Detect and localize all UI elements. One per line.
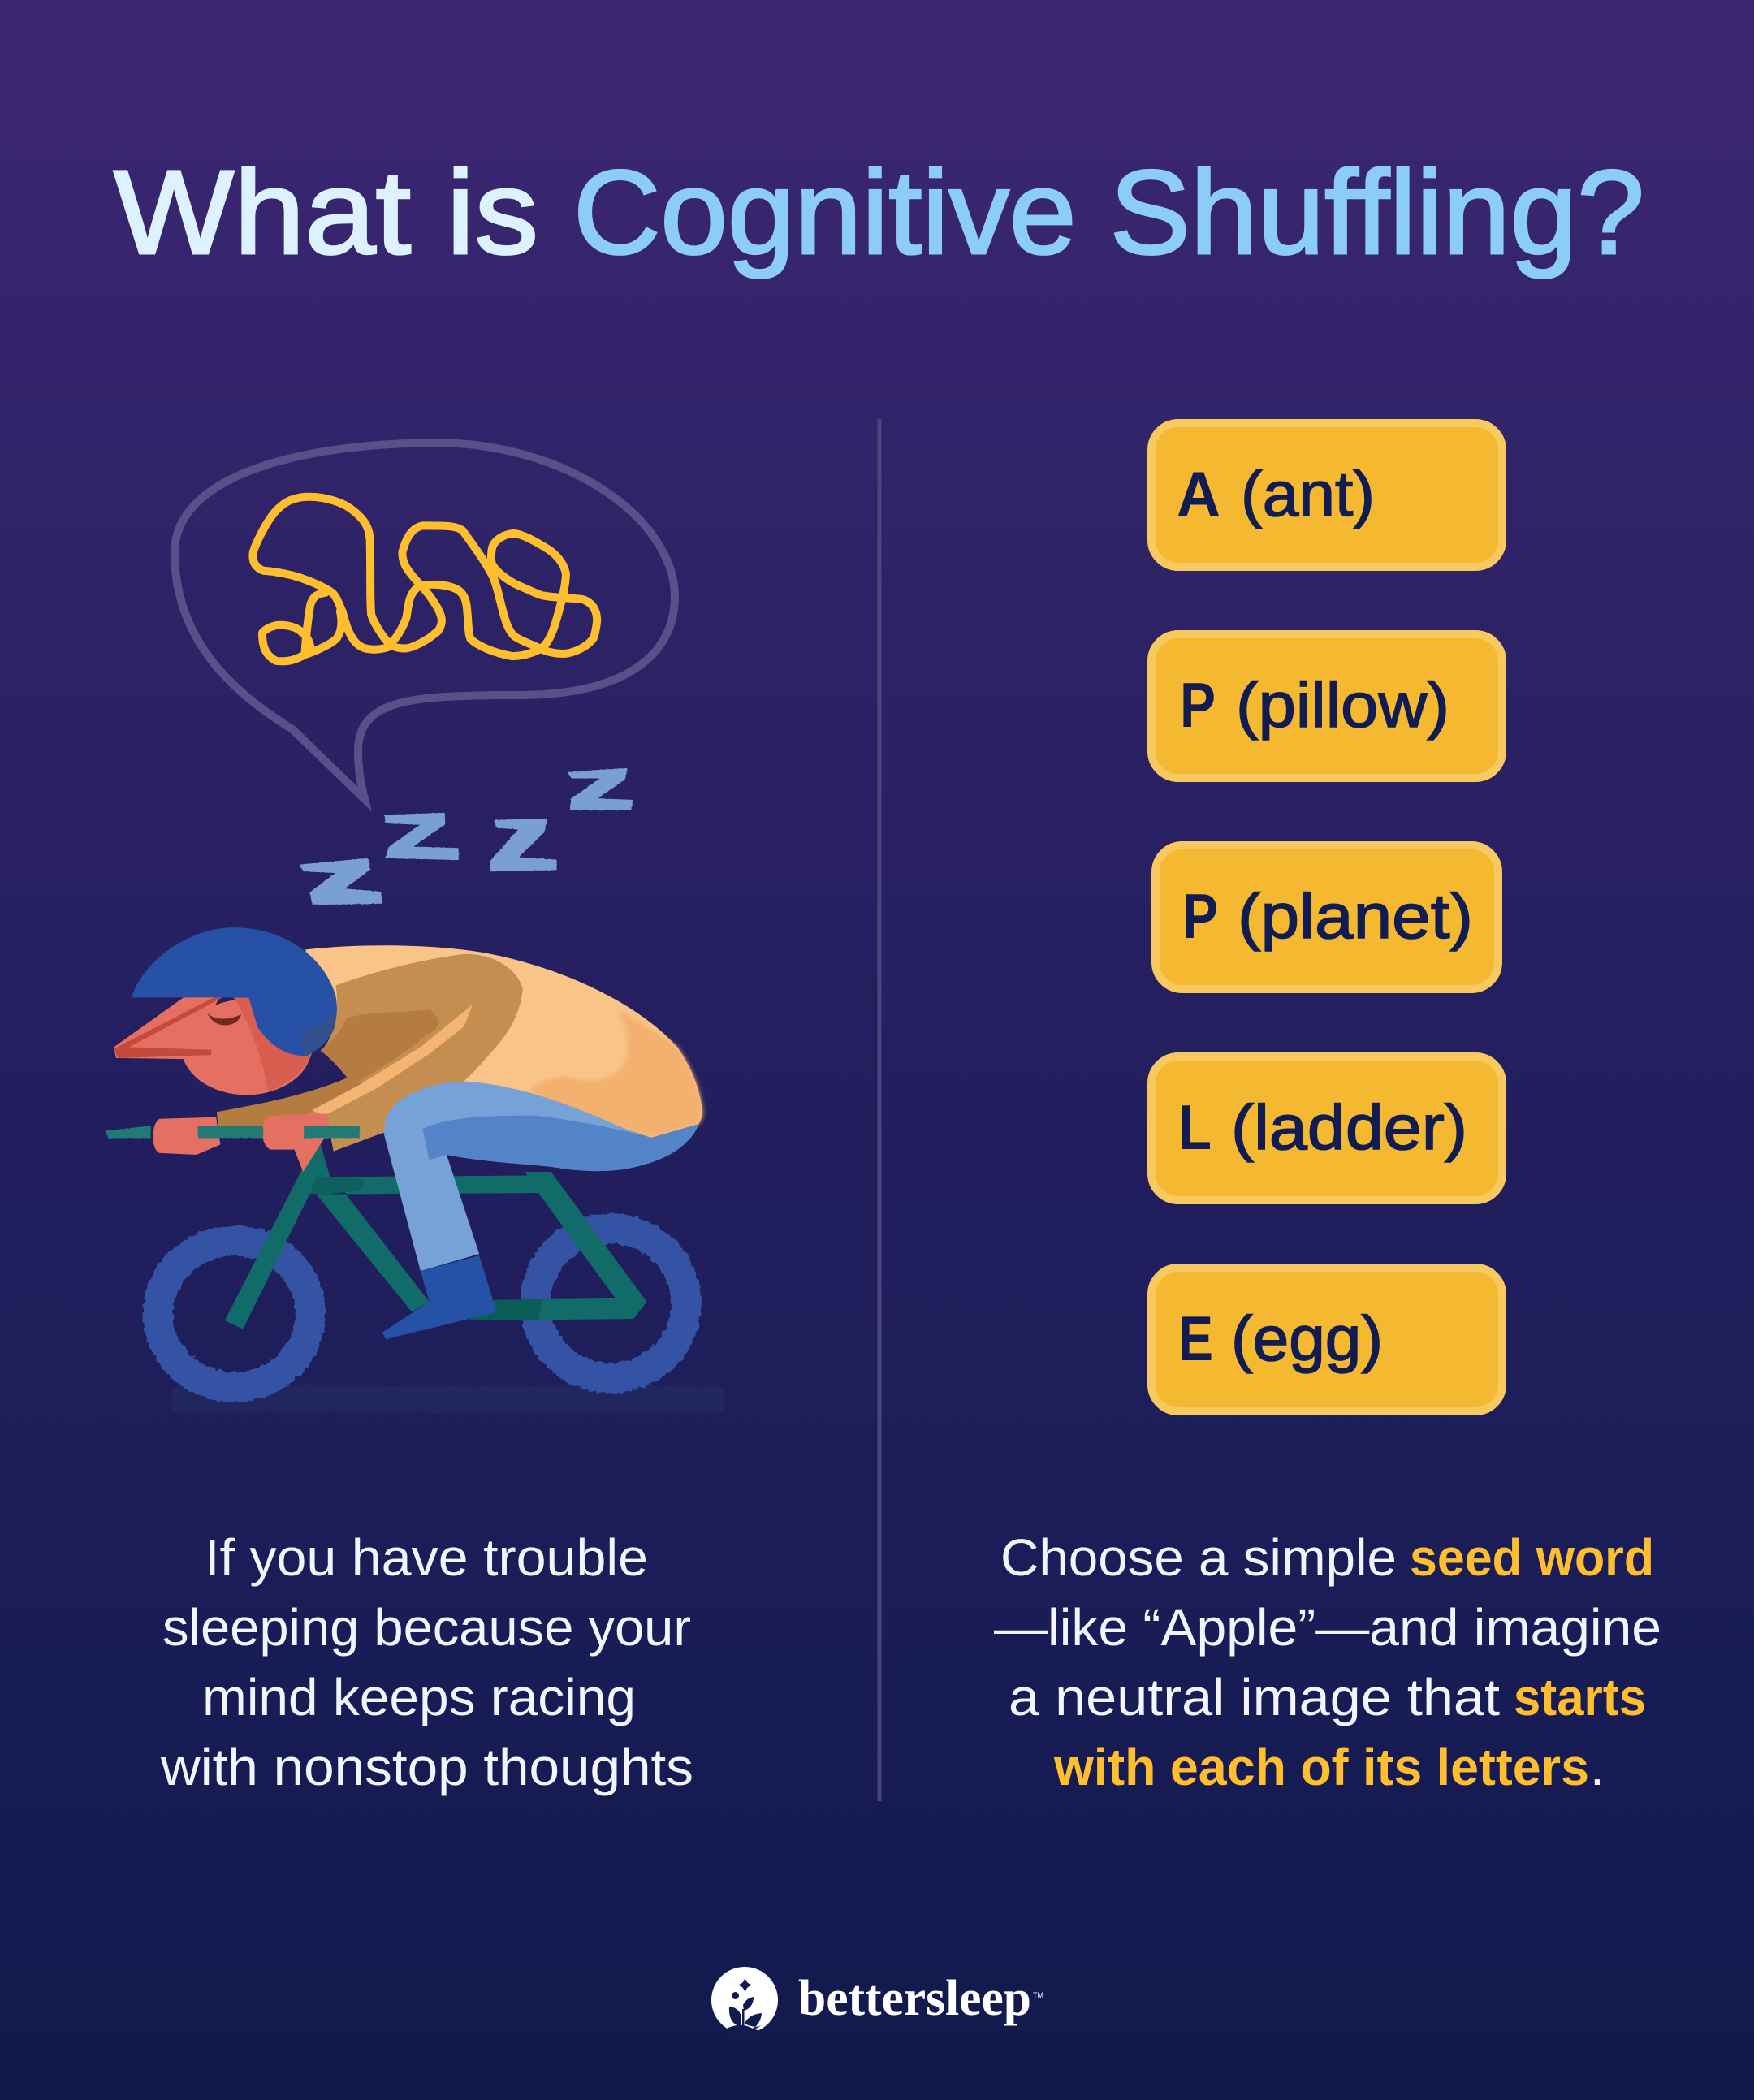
text block: right description: [994, 1528, 1661, 1796]
card: P (planet): [1156, 845, 1498, 989]
rider: [105, 927, 702, 1339]
torso: [305, 945, 702, 1138]
logo: bettersleep: TM: [1033, 1991, 1043, 1999]
title: Cognitive Shuffling?: [573, 146, 1644, 279]
card: A (ant): A: [1177, 458, 1220, 529]
icon: tangled thought scribble: [253, 497, 597, 661]
text block: right description: —like “Apple”—and imagine: [994, 1598, 1661, 1657]
icon: thought bubble: [175, 443, 675, 799]
card: A (ant): [1151, 423, 1502, 567]
text block: right description: with each of its letters: [1053, 1738, 1589, 1796]
text block: left description: If you have trouble: [205, 1528, 648, 1587]
text block: left description: sleeping because your: [162, 1598, 691, 1657]
text block: right description: seed word: [1410, 1528, 1654, 1587]
panel: seed word letters: [1151, 423, 1502, 1411]
card: P (pillow): (pillow): [1236, 669, 1449, 741]
bicycle wheels: [158, 1229, 686, 1387]
icon: logo mark: [711, 1967, 778, 2038]
card: P (pillow): [1151, 634, 1502, 778]
title: [114, 146, 1644, 279]
leg: [383, 1081, 699, 1271]
card: E (egg): [1151, 1268, 1502, 1411]
icon: cyclist asleep on a bike: [105, 927, 724, 1412]
shoe: [382, 1255, 497, 1339]
text block: left description: with nonstop thoughts: [160, 1738, 693, 1796]
text block: left description: mind keeps racing: [202, 1668, 636, 1726]
handlebar: [105, 1126, 360, 1138]
icon: sleeping z letters: [300, 769, 632, 904]
logo: bettersleep: bettersleep: [798, 1971, 1031, 2026]
card: P (planet): P: [1182, 880, 1218, 952]
card: P (planet): (planet): [1238, 880, 1473, 952]
hands: [153, 1117, 220, 1155]
card: L (ladder): [1151, 1056, 1502, 1200]
text block: right description: a neutral image that: [1009, 1668, 1500, 1726]
card: P (pillow): P: [1180, 669, 1216, 741]
card: L (ladder): L: [1178, 1091, 1212, 1163]
text block: left description: [160, 1528, 693, 1796]
card: A (ant): (ant): [1241, 458, 1375, 529]
text block: right description: Choose a simple: [1000, 1528, 1397, 1587]
head: [181, 999, 312, 1095]
card: E (egg): (egg): [1231, 1303, 1383, 1374]
bicycle frame: [225, 1136, 646, 1329]
panel: left illustration: [105, 443, 724, 1412]
text block: right description: .: [1590, 1738, 1605, 1796]
title: What is: [114, 146, 538, 279]
card: L (ladder): (ladder): [1231, 1091, 1467, 1163]
card: E (egg): E: [1178, 1303, 1213, 1374]
text block: right description: starts: [1514, 1668, 1646, 1726]
logo: bettersleep: [711, 1967, 1043, 2038]
ground shadow: [172, 1385, 724, 1412]
helmet: [132, 927, 337, 1056]
arm and shoulder: [217, 954, 523, 1152]
